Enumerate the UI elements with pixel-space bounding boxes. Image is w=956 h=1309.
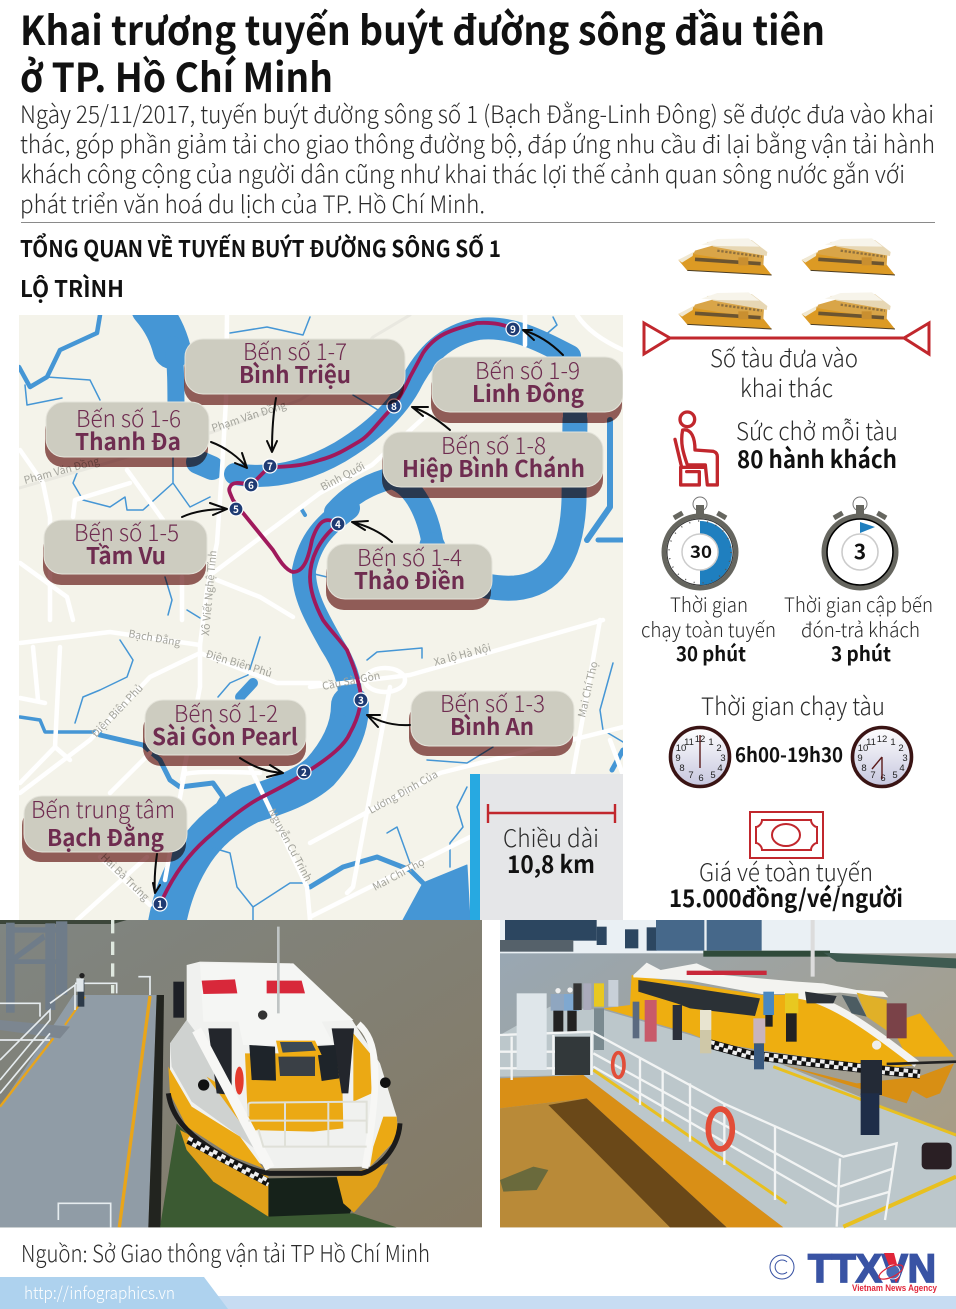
label: Bến số 1-9: Linh Đông	[472, 375, 584, 409]
life rings	[613, 1053, 732, 1149]
text: docking time	[784, 589, 933, 667]
label: Bến số 1-2: Bến số 1-2	[174, 695, 278, 729]
source line: Nguồn: Sở Giao thông vận tải TP Hồ Chí Minh	[21, 1235, 430, 1269]
logo: TTXVN: TTXVN	[808, 1247, 936, 1291]
icon: clock 19h30: 5	[892, 770, 898, 781]
icon: clock 19h30: 4	[899, 763, 905, 774]
icon: clock 19h30: 8	[861, 763, 867, 774]
label: Bến số 1-7: Bình Triệu	[239, 356, 351, 390]
icon: clock 6h00: 4	[717, 763, 723, 774]
text: capacity: 80 hành khách	[737, 440, 897, 475]
label: Bến số 1-6	[45, 400, 209, 467]
stop markers: 5	[233, 501, 239, 516]
icon: clock 6h00: 3	[720, 753, 726, 764]
text: full route time: 30 phút	[676, 638, 747, 667]
icon: stopwatch 3: 3	[854, 536, 866, 566]
label: Bến số 1-9	[431, 352, 623, 423]
label: Bến trung tâm: Bến trung tâm	[31, 791, 175, 825]
stop markers: 3	[358, 692, 364, 707]
railings	[500, 993, 897, 1227]
icon: clock 19h30: 3	[902, 753, 908, 764]
route length panel	[470, 774, 623, 920]
bus route line	[160, 323, 513, 904]
icon: clock 6h00: 10	[676, 743, 686, 754]
road labels: Mai Chí Thọ	[574, 660, 602, 719]
roads	[19, 315, 623, 920]
icon: clock 19h30: 12	[877, 734, 887, 745]
title: ở TP. Hồ Chí Minh	[20, 46, 333, 104]
label: Bến số 1-8	[382, 427, 603, 498]
icon: clock 6h00: 9	[675, 753, 681, 764]
road labels: Xa lộ Hà Nội	[432, 640, 493, 670]
icon: stopwatch 30: 30	[690, 538, 712, 563]
stop markers	[153, 321, 520, 911]
intro text block: phát triển văn hoá du lịch của TP. Hồ Chí Minh.	[20, 185, 485, 220]
label: Bến trung tâm	[22, 791, 187, 862]
label: Bến trung tâm: Bạch Đằng	[47, 819, 164, 853]
route heading: LỘ TRÌNH	[20, 270, 124, 304]
text: docking time: đón-trả khách	[801, 614, 920, 643]
icon: red pointer bar	[644, 323, 929, 354]
icon: clock 6h00: 1	[708, 737, 714, 748]
text: full route time: Thời gian	[670, 589, 748, 618]
text: number of boats	[710, 339, 858, 404]
logo: TTXVN: Vietnam News Agency	[852, 1283, 937, 1293]
icon: stopwatch 3	[824, 497, 896, 588]
stop markers: 2	[301, 764, 307, 779]
text: docking time: 3 phút	[831, 638, 892, 667]
text: full route time	[641, 589, 776, 667]
label: Bến số 1-2	[143, 695, 306, 766]
road labels	[22, 398, 602, 904]
text: operating hours: 6h00-19h30	[735, 739, 843, 768]
text: fare: 15.000đồng/vé/người	[669, 879, 903, 914]
icon: seated passenger	[675, 412, 717, 485]
text: capacity	[736, 412, 898, 475]
road labels: Cầu Sài Gòn	[321, 668, 381, 694]
skyline	[500, 920, 956, 968]
road labels: Bạch Đằng	[127, 626, 182, 650]
icon: clock 19h30: 7	[870, 770, 876, 781]
road labels: Phạm Văn Đồng	[22, 453, 101, 488]
icon: clock 6h00	[670, 728, 730, 786]
photo: boat at pier	[0, 920, 482, 1227]
text: number of boats: khai thác	[740, 369, 833, 404]
label: Bến số 1-3: Bình An	[450, 708, 534, 742]
river	[19, 308, 625, 935]
icon: clock 19h30	[852, 728, 912, 786]
ferry	[603, 920, 956, 1103]
photo: passengers on pier	[490, 920, 956, 1227]
cabin	[245, 1053, 343, 1132]
label: Bến số 1-9: Bến số 1-9	[475, 352, 580, 386]
road labels: Phạm Văn Đồng	[210, 398, 288, 436]
text: fare: Giá vé toàn tuyến	[699, 853, 873, 888]
icon: clock 6h00: 5	[710, 770, 716, 781]
stop markers: 7	[267, 458, 273, 473]
label: Bến số 1-3: Bến số 1-3	[440, 685, 545, 719]
icon: clock 6h00: 6	[698, 773, 704, 784]
label: Bến số 1-4: Bến số 1-4	[357, 539, 462, 573]
icon: stopwatch 30	[664, 497, 736, 588]
road labels: Nguyễn Cư Trinh	[264, 806, 316, 884]
route length panel: 10,8 km	[507, 845, 595, 880]
label: Bến số 1-8: Hiệp Bình Chánh	[402, 450, 585, 484]
dock	[500, 1007, 956, 1227]
footer band	[0, 1277, 956, 1309]
icon: clock 19h30: 9	[857, 753, 863, 764]
road labels: Điện Biên Phủ	[88, 681, 147, 741]
label: Bến số 1-5	[43, 514, 207, 585]
label: Bến số 1-3	[409, 685, 574, 756]
footer band: http://infographics.vn	[24, 1279, 175, 1304]
stop markers: 4	[335, 516, 341, 531]
icon: four boats	[678, 238, 895, 329]
icon: clock 6h00: 2	[716, 743, 722, 754]
text: fare	[669, 853, 903, 914]
stop markers: 8	[391, 398, 397, 413]
stop markers: 9	[510, 321, 516, 336]
label: Bến số 1-2: Sài Gòn Pearl	[152, 718, 298, 752]
icon: clock 6h00: 11	[684, 737, 694, 748]
icon: clock 19h30: 10	[858, 743, 868, 754]
road labels: Xô Viết Nghệ Tĩnh	[198, 550, 220, 636]
text: capacity: Sức chở mỗi tàu	[736, 412, 898, 447]
title	[20, 0, 825, 104]
text: operating hours heading: Thời gian chạy tàu	[701, 687, 885, 722]
road labels: Điện Biên Phủ	[204, 646, 274, 681]
people	[551, 980, 907, 1135]
intro text block: khách công cộng của người dân cũng như khai thác lợi thế cảnh quan sông nước gắn với	[20, 155, 905, 190]
label: Bến số 1-7	[184, 333, 405, 405]
road labels: Mai Chí Thọ	[370, 855, 427, 895]
icon: clock 19h30: 2	[898, 743, 904, 754]
label: Bến số 1-6: Thanh Đa	[75, 423, 181, 457]
icon: ticket	[750, 812, 823, 858]
label: Bến số 1-8: Bến số 1-8	[441, 427, 546, 461]
road labels: Lương Định Của	[366, 767, 441, 817]
icon: clock 19h30: 11	[866, 737, 876, 748]
vegetation	[160, 1123, 397, 1227]
icon: clock 19h30: 6	[880, 773, 886, 784]
icon: clock 6h00: 8	[679, 763, 685, 774]
route length panel: Chiều dài	[503, 819, 599, 854]
stop markers: 6	[248, 477, 254, 492]
text: full route time: chạy toàn tuyến	[641, 614, 776, 643]
title: Khai trương tuyến buýt đường sông đầu tiên	[20, 0, 825, 57]
hull	[168, 927, 400, 1217]
icon: clock 6h00: 12	[695, 734, 705, 745]
stop markers: 1	[157, 896, 163, 911]
route map	[19, 308, 625, 935]
road labels: Hai Bà Trưng	[97, 850, 153, 904]
road labels: Bình Quới	[318, 459, 368, 495]
intro text block	[20, 95, 935, 220]
label: Bến số 1-5: Tầm Vu	[86, 537, 166, 571]
label: Bến số 1-7: Bến số 1-7	[243, 333, 347, 367]
label: Bến số 1-5: Bến số 1-5	[74, 514, 179, 548]
text: number of boats: Số tàu đưa vào	[710, 339, 858, 374]
pier deck	[0, 973, 164, 1227]
label: Bến số 1-4	[326, 539, 492, 610]
arrows	[153, 330, 563, 893]
icon: clock 19h30: 1	[890, 737, 896, 748]
label: Bến số 1-6: Bến số 1-6	[76, 400, 181, 434]
text: docking time: Thời gian cập bến	[784, 589, 933, 618]
label: Bến số 1-4: Thảo Điền	[354, 562, 465, 596]
pier structure	[6, 921, 67, 1013]
small waterways	[25, 317, 623, 920]
icon: clock 6h00: 7	[688, 770, 694, 781]
section heading: TỔNG QUAN VỀ TUYẾN BUÝT ĐƯỜNG SÔNG SỐ 1	[20, 230, 501, 264]
